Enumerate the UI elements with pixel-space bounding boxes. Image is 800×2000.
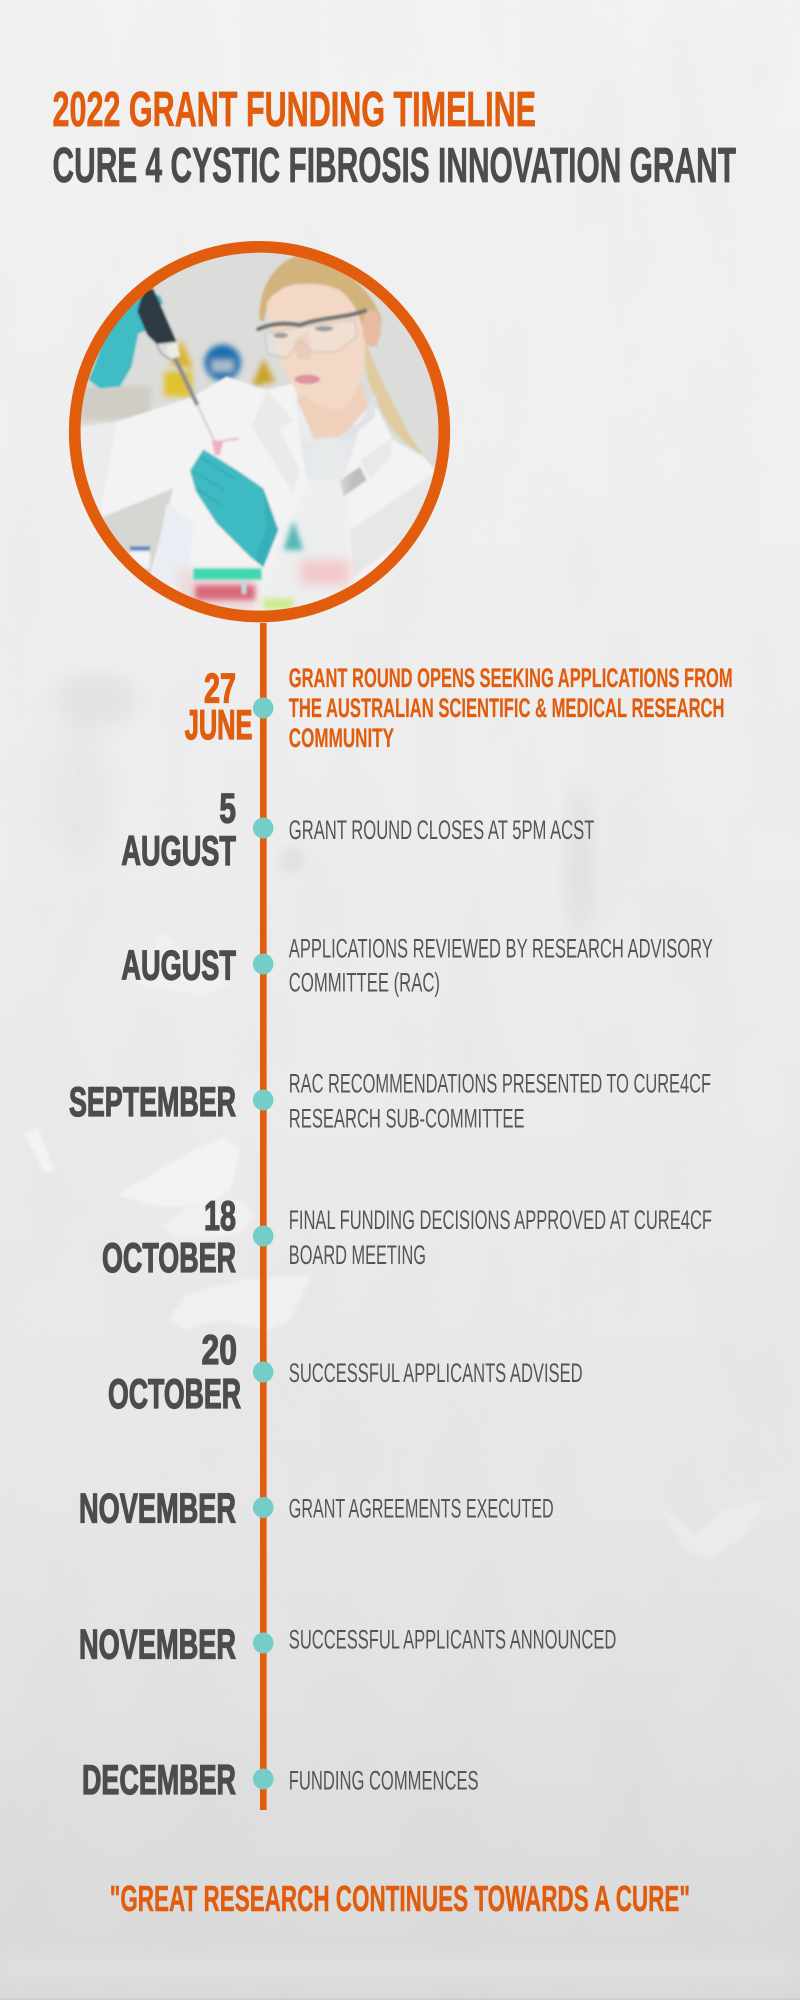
description <box>289 933 713 998</box>
mouth <box>295 375 320 384</box>
marker dot <box>253 1090 274 1110</box>
month: SEPTEMBER <box>69 1079 236 1125</box>
description: GRANT ROUND CLOSES AT 5PM ACST <box>289 814 594 845</box>
month: NOVEMBER <box>79 1486 236 1532</box>
hair <box>259 256 382 347</box>
date: 27 <box>204 666 236 712</box>
marker dot <box>253 698 274 718</box>
eyes <box>273 333 288 338</box>
month: DECEMBER <box>82 1757 236 1803</box>
title <box>52 83 736 193</box>
description: COMMUNITY <box>289 722 394 753</box>
month: NOVEMBER <box>79 1622 236 1668</box>
marker dot <box>253 954 274 974</box>
face <box>267 284 365 410</box>
date: 20 <box>202 1327 237 1373</box>
neck <box>297 383 368 440</box>
marker dot <box>253 1632 274 1654</box>
description: COMMITTEE (RAC) <box>289 967 440 998</box>
raised glove <box>88 295 163 388</box>
timeline item: November agreements <box>79 1486 554 1532</box>
sample tube <box>212 440 223 455</box>
shirt front <box>301 434 357 480</box>
marker dot <box>253 1226 274 1246</box>
timeline line <box>260 623 267 1810</box>
timeline item: August <box>121 933 713 998</box>
description <box>289 1068 711 1134</box>
description: SUCCESSFUL APPLICANTS ADVISED <box>289 1357 583 1388</box>
description: BOARD MEETING <box>289 1239 426 1270</box>
month: OCTOBER <box>108 1371 241 1417</box>
date: 18 <box>204 1193 236 1239</box>
description: RESEARCH SUB-COMMITTEE <box>289 1103 524 1134</box>
timeline item: 18 October <box>102 1193 712 1281</box>
timeline item: November announcement <box>79 1622 616 1668</box>
timeline item: 5 August <box>121 786 594 874</box>
timeline item: 20 October <box>108 1327 583 1417</box>
lab coat <box>81 377 439 611</box>
month: AUGUST <box>121 828 236 874</box>
description: GRANT AGREEMENTS EXECUTED <box>289 1492 554 1524</box>
ponytail <box>365 340 422 455</box>
marker dot <box>253 1768 274 1790</box>
timeline item: September <box>69 1068 711 1134</box>
ear <box>362 310 381 347</box>
marker dot <box>253 818 274 838</box>
photo: scientist in circular frame <box>75 247 444 617</box>
marker dot <box>253 1497 274 1518</box>
timeline item: December <box>82 1757 479 1803</box>
timeline item: 27 June <box>185 662 733 753</box>
lower glove <box>190 449 278 567</box>
safety glasses <box>265 320 357 358</box>
marker dot <box>253 1362 274 1382</box>
description <box>289 1204 712 1270</box>
pipette <box>137 288 177 344</box>
month: OCTOBER <box>102 1235 236 1281</box>
lab wall <box>80 252 438 469</box>
month: AUGUST <box>121 942 236 988</box>
description <box>289 662 733 753</box>
month: JUNE <box>185 702 252 748</box>
shirt collar <box>298 404 314 441</box>
orange ring <box>75 247 444 616</box>
description: FUNDING COMMENCES <box>289 1765 479 1796</box>
date: 5 <box>219 786 236 832</box>
foreground blurred glassware <box>177 440 353 613</box>
